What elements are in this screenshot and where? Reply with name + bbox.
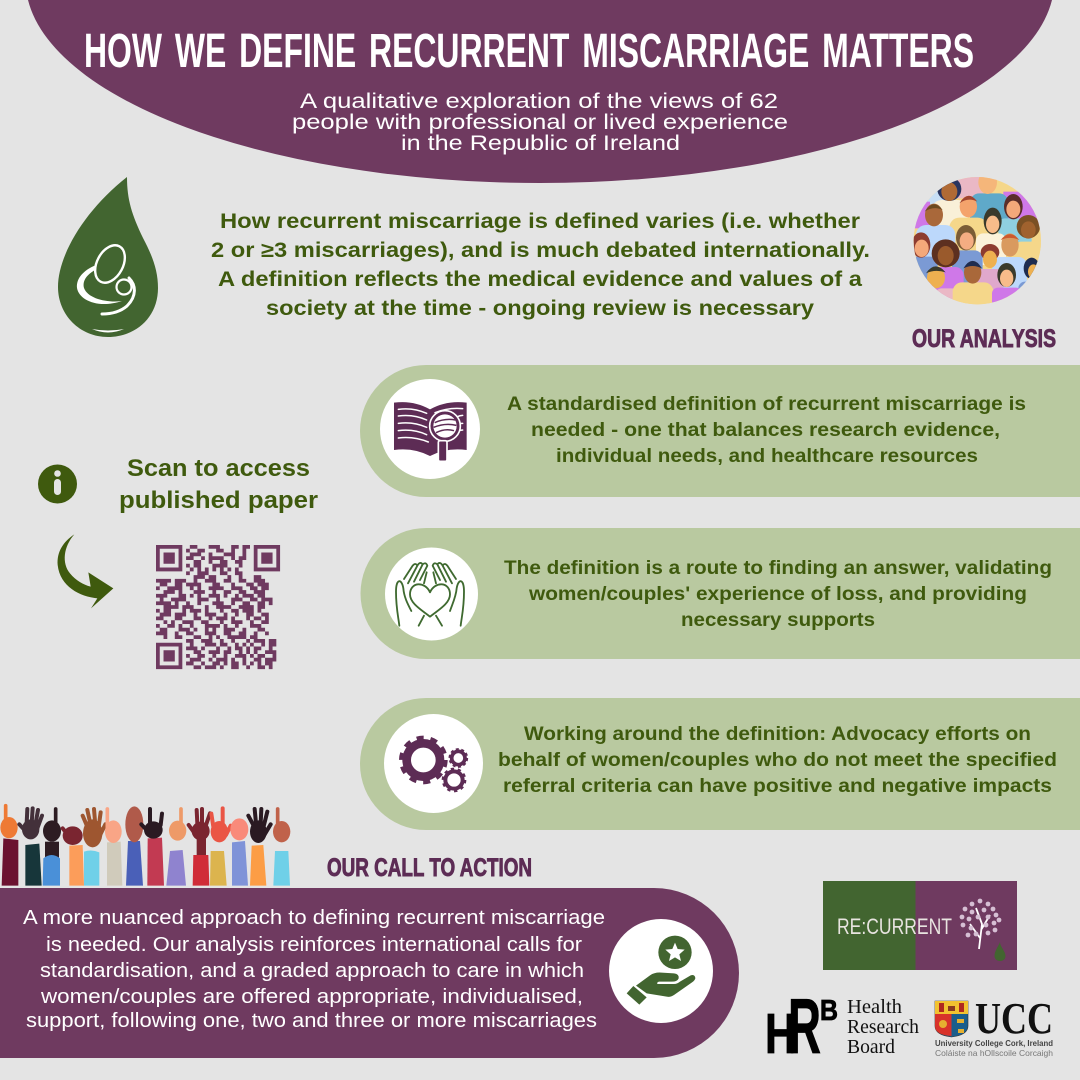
icon: crowd of people circle <box>914 177 1041 304</box>
crest <box>935 1001 968 1037</box>
logo: Health Research Board: Health <box>847 996 902 1018</box>
logo: RE:CURRENT: RE:CURRENT <box>837 914 952 939</box>
text: individual needs, and healthcare resources <box>556 445 978 467</box>
subtitle <box>292 90 788 155</box>
back row <box>934 200 968 226</box>
text: is needed. Our analysis reinforces international calls for <box>46 934 582 956</box>
text: standardisation, and a graded approach to care in which <box>40 960 584 982</box>
text <box>498 723 1057 797</box>
text <box>23 907 605 1032</box>
panel: call to action <box>0 888 739 1058</box>
logo: Health Research Board: Research <box>847 1016 919 1038</box>
lower row <box>916 256 938 286</box>
icon: hands holding heart <box>385 548 478 640</box>
logo: University College Cork: University College Cork, Ireland <box>935 1038 1053 1048</box>
panel: route to an answer <box>360 528 1080 659</box>
logo: RE:CURRENT <box>823 881 1017 970</box>
subtitle: A qualitative exploration of the views of 62 <box>300 90 778 113</box>
sleeves <box>2 838 290 886</box>
text: women/couples are offered appropriate, individualised, <box>40 986 583 1008</box>
arrow: curved toward QR code <box>58 534 113 608</box>
logo: University College Cork: UCC <box>975 994 1053 1043</box>
logo: Health Research Board <box>765 982 919 1070</box>
text: behalf of women/couples who do not meet the specified <box>498 749 1057 771</box>
subtitle: in the Republic of Ireland <box>401 132 680 155</box>
icon: hand holding star <box>609 919 713 1023</box>
front row <box>938 288 958 302</box>
panel: header banner <box>26 0 1054 183</box>
text block: scan prompt <box>119 455 318 514</box>
panel: standardised definition <box>360 365 1080 497</box>
text: necessary supports <box>681 609 875 631</box>
icon: information <box>38 464 77 504</box>
icon: open book with magnifying glass <box>380 379 480 479</box>
text: Working around the definition: Advocacy efforts on <box>524 723 1031 745</box>
logo: Health Research Board: R <box>788 982 821 1070</box>
text block: scan prompt: Scan to access <box>127 455 310 482</box>
illustration: raised hands <box>0 806 290 886</box>
text: support, following one, two and three or more miscarriages <box>26 1010 597 1032</box>
subtitle: people with professional or lived experience <box>292 111 788 134</box>
text: needed - one that balances research evidence, <box>531 419 1000 441</box>
text: The definition is a route to finding an answer, validating <box>504 557 1052 579</box>
tree <box>960 899 1006 961</box>
middle row <box>950 218 986 244</box>
text block: scan prompt: published paper <box>119 487 318 514</box>
text: A standardised definition of recurrent miscarriage is <box>507 393 1026 415</box>
text block: definition intro <box>211 210 870 320</box>
logo: Health Research Board: H <box>765 1002 796 1066</box>
logo: University College Cork <box>935 994 1053 1058</box>
text block: definition intro: A definition reflects the medical evidence and values of a <box>218 268 862 291</box>
text: referral criteria can have positive and negative impacts <box>503 775 1052 797</box>
QR code <box>156 545 280 669</box>
text <box>507 393 1026 467</box>
logo: Health Research Board: B <box>820 995 838 1027</box>
hands <box>0 806 290 847</box>
heading: our call to action: OUR CALL TO ACTION <box>327 854 532 882</box>
logo: University College Cork: Coláiste na hOllscoile Corcaigh <box>935 1048 1053 1058</box>
text block: definition intro: 2 or ≥3 miscarriages), and is much debated internationally. <box>211 239 870 262</box>
panel: working around the definition <box>360 698 1080 830</box>
icon: gears <box>384 714 483 813</box>
text: women/couples' experience of loss, and providing <box>528 583 1027 605</box>
logo: Health Research Board: Board <box>847 1036 895 1058</box>
icon: green drop with mother and baby <box>58 177 158 337</box>
text: A more nuanced approach to defining recurrent miscarriage <box>23 907 605 929</box>
text <box>504 557 1052 631</box>
text block: definition intro: How recurrent miscarriage is defined varies (i.e. whether <box>220 210 860 233</box>
text block: definition intro: society at the time - ongoing review is necessary <box>266 297 814 320</box>
